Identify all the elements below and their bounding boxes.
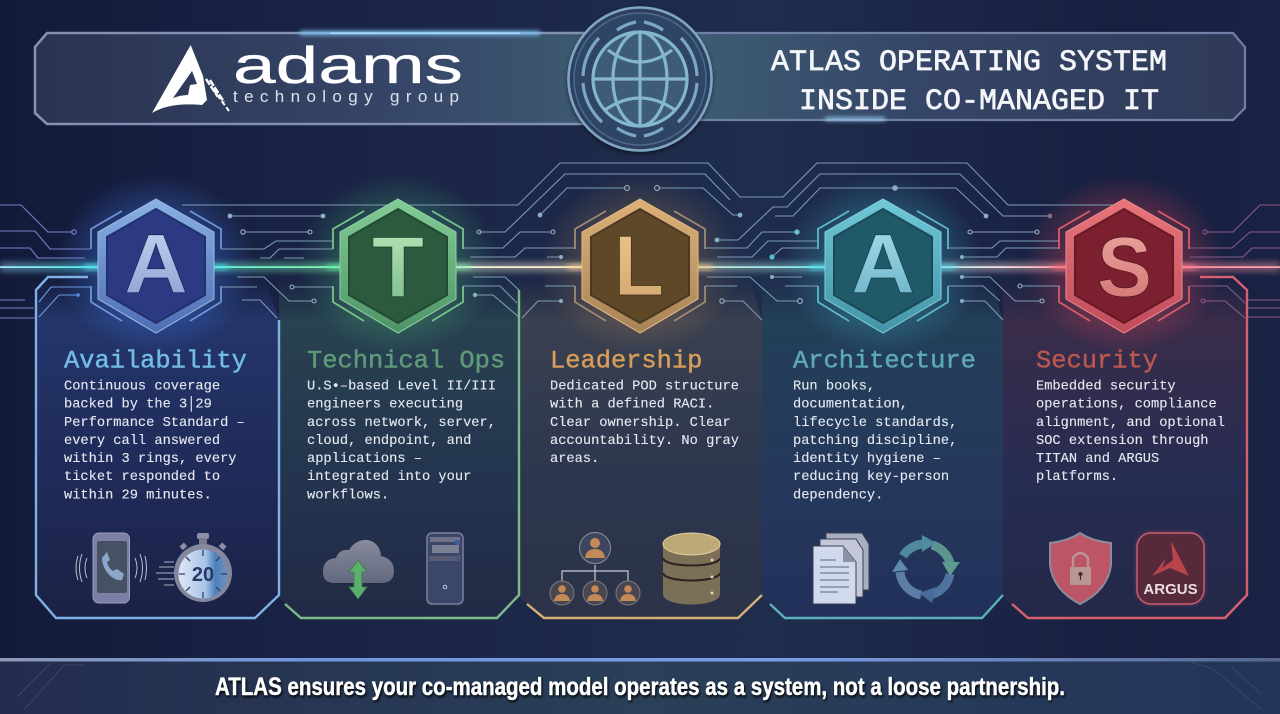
card frame	[285, 290, 519, 618]
body text: cloud, endpoint, and	[307, 434, 471, 449]
divider	[1002, 320, 1004, 595]
body text: platforms.	[1036, 470, 1118, 485]
icon: globe	[568, 8, 712, 150]
body text	[64, 380, 245, 503]
body text	[793, 380, 957, 503]
badge: S: S	[1097, 220, 1152, 314]
icon row	[550, 532, 720, 605]
badge: S	[1059, 199, 1189, 333]
icon row	[76, 533, 232, 603]
title: ATLAS OPERATING SYSTEM	[771, 46, 1167, 80]
body text: Dedicated POD structure	[550, 380, 739, 394]
body text: operations, compliance	[1036, 398, 1217, 413]
header panel: logo	[35, 31, 620, 124]
badge: A: A	[124, 217, 188, 311]
card fills	[36, 277, 1247, 618]
body text: dependency.	[793, 488, 883, 503]
body text: within 29 minutes.	[64, 488, 212, 503]
body text: Run books,	[793, 380, 875, 394]
heading: Leadership	[550, 346, 702, 376]
body text: Clear ownership. Clear	[550, 416, 731, 431]
icon: stopwatch: 20	[192, 564, 214, 586]
body text: reducing key-person	[793, 470, 949, 485]
logo wordmark: adams	[233, 37, 463, 95]
heading: Security	[1036, 346, 1158, 376]
body text: ticket responded to	[64, 470, 220, 485]
icon row	[813, 533, 960, 604]
badge: A	[818, 199, 948, 333]
body text: Continuous coverage	[64, 380, 220, 394]
card frame	[36, 277, 279, 618]
icon: documents	[813, 533, 869, 604]
title	[771, 46, 1167, 119]
card frame	[1012, 277, 1247, 618]
badge: A: A	[851, 217, 915, 311]
title: INSIDE CO-MANAGED IT	[799, 85, 1159, 119]
body text: engineers executing	[307, 398, 463, 413]
icon row	[323, 533, 463, 604]
body text: within 3 rings, every	[64, 452, 236, 467]
panel: Technical Ops	[279, 290, 519, 618]
body text: workflows.	[307, 488, 389, 503]
header highlight	[825, 118, 885, 120]
body text: Performance Standard –	[64, 416, 245, 431]
card frame	[527, 595, 762, 618]
badge glows	[56, 174, 1224, 354]
body text: across network, server,	[307, 416, 496, 431]
heading: Architecture	[793, 346, 976, 376]
body text	[550, 380, 739, 467]
footer banner	[0, 658, 1280, 714]
header highlight	[300, 31, 540, 35]
body text: backed by the 3│29	[64, 396, 212, 413]
body text: identity hygiene –	[793, 452, 941, 467]
body text: every call answered	[64, 434, 220, 449]
heading: Technical Ops	[307, 346, 505, 376]
logo tagline: technology group	[233, 87, 459, 106]
body text: TITAN and ARGUS	[1036, 452, 1159, 467]
icon: phone	[76, 533, 146, 603]
divider	[761, 320, 763, 595]
badge: T: T	[372, 220, 424, 316]
badge: L	[575, 199, 705, 333]
header panel: title	[680, 33, 1245, 120]
badge: T	[333, 199, 463, 333]
body text: accountability. No gray	[550, 434, 739, 449]
body text: integrated into your	[307, 470, 471, 485]
body text: Embedded security	[1036, 380, 1176, 394]
icon: shield with padlock	[1050, 533, 1111, 604]
body text	[1036, 380, 1225, 485]
heading: Availability	[64, 346, 247, 376]
panel: Security	[1012, 277, 1247, 618]
divider	[278, 320, 280, 595]
panel: Leadership	[527, 320, 762, 618]
body text: applications –	[307, 452, 422, 467]
icon: server tower	[427, 533, 463, 604]
icon: org chart	[550, 532, 640, 605]
circuit traces	[0, 163, 1280, 320]
icon: lifecycle arrows	[892, 535, 960, 603]
icon: ARGUS badge	[1137, 533, 1204, 604]
body text: SOC extension through	[1036, 434, 1208, 449]
body text: lifecycle standards,	[793, 416, 957, 431]
icon: cloud with arrows	[323, 540, 394, 599]
badge: A	[91, 199, 221, 333]
main light beam	[0, 262, 1280, 272]
panel: Availability	[36, 277, 279, 618]
icon: database	[663, 533, 720, 604]
icon row	[1050, 533, 1204, 604]
body text: alignment, and optional	[1036, 416, 1225, 431]
body text: patching discipline,	[793, 434, 957, 449]
logo mark	[152, 45, 229, 113]
card frame	[770, 595, 1003, 618]
panel: Architecture	[770, 320, 1003, 618]
body text: with a defined RACI.	[550, 398, 714, 413]
footer statement: ATLAS ensures your co-managed model operates as a system, not a loose partnership.	[215, 673, 1065, 701]
body text: U.S•–based Level II/III	[307, 380, 496, 394]
badge: L: L	[614, 219, 664, 314]
icon: stopwatch	[156, 533, 232, 602]
body text	[307, 380, 496, 503]
icon: ARGUS badge: ARGUS	[1143, 581, 1198, 598]
body text: documentation,	[793, 398, 908, 413]
body text: areas.	[550, 452, 599, 467]
